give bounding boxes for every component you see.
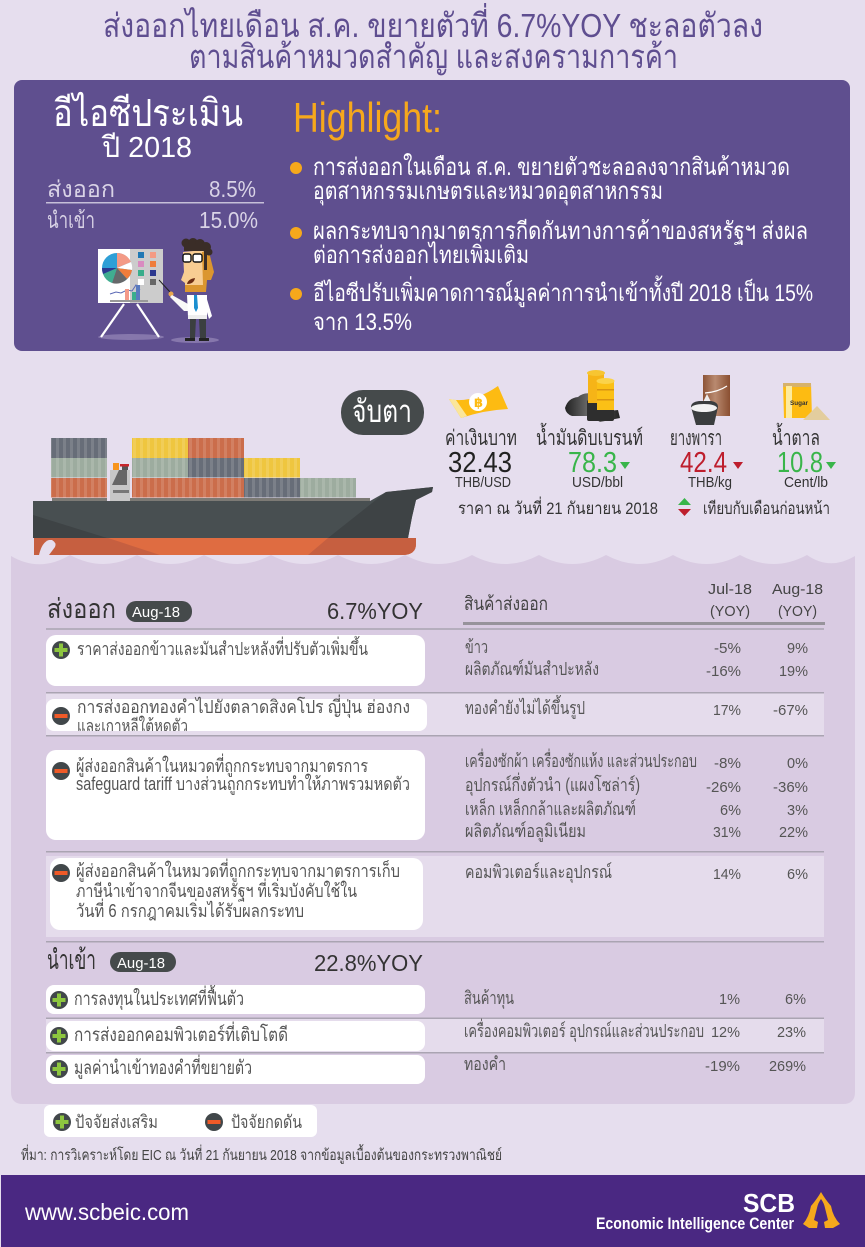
indicator: rubber <box>670 427 743 491</box>
rows: rice and cassava <box>465 637 808 680</box>
icon: SCB logo <box>803 1192 840 1228</box>
indicators <box>445 423 836 491</box>
forecast table: ส่งออก <box>47 176 115 202</box>
note: price date and comparison: ราคา ณ วันที่ 21 กันยายน 2018 <box>458 496 658 518</box>
factor: US tariffs on China: ภาษีนำเข้าจากจีนของสหรัฐฯ ที่เริ่มบังคับใช้ใน <box>76 878 357 902</box>
rows: rice and cassava: 9% <box>787 640 808 657</box>
row: computers: คอมพิวเตอร์และอุปกรณ์ <box>465 862 612 883</box>
factor: investment: การลงทุนในประเทศที่ฟื้นตัว <box>74 985 244 1011</box>
rows: safeguard: ผลิตภัณฑ์อลูมิเนียม <box>465 821 586 842</box>
legend <box>44 1105 317 1137</box>
panel: data table <box>11 555 855 1104</box>
rows: rice and cassava: 19% <box>779 663 808 680</box>
indicator: sugar: น้ำตาล <box>772 423 820 450</box>
row: computers and parts: เครื่องคอมพิวเตอร์ อุปกรณ์และส่วนประกอบ <box>464 1018 704 1042</box>
row: gold imports: 269% <box>769 1058 806 1075</box>
row: gold: 17% <box>713 702 741 719</box>
table header: สินค้าส่งออก <box>464 594 548 615</box>
bullet 3: จาก 13.5% <box>313 309 412 336</box>
panel: highlight <box>14 80 850 351</box>
table header: Jul-18 <box>708 581 752 598</box>
rows: safeguard: 31% <box>713 824 741 841</box>
indicator: sugar <box>772 423 836 491</box>
indicator: baht: 32.43 <box>448 447 512 479</box>
indicator: sugar: 10.8 <box>777 447 823 479</box>
row: computers: 14% <box>713 866 741 883</box>
factor: computer exports <box>46 1021 425 1051</box>
icon: presenter with chart <box>98 238 219 343</box>
imports heading <box>47 945 423 976</box>
note: price date and comparison <box>458 496 830 518</box>
row: capital goods: สินค้าทุน <box>464 988 514 1009</box>
factor: US tariffs on China: วันที่ 6 กรกฎาคมเริ่มได้รับผลกระทบ <box>76 898 304 921</box>
icon: oil barrels <box>565 370 620 422</box>
factor: gold exports: และเกาหลีใต้หดตัว <box>77 715 188 736</box>
factor: safeguard: safeguard tariff บางส่วนถูกกระทบทำให้ภาพรวมหดตัว <box>76 773 410 795</box>
footer band: Economic Intelligence Center <box>596 1214 794 1233</box>
indicator: brent: USD/bbl <box>572 474 623 491</box>
website: www.scbeic.com <box>24 1199 189 1225</box>
forecast table: 15.0% <box>199 207 258 233</box>
icon: sugar bag: Sugar <box>790 401 809 407</box>
rows: rice and cassava: -16% <box>706 663 741 680</box>
indicator: baht: ค่าเงินบาท <box>445 427 517 450</box>
factor: rice and cassava <box>46 635 425 686</box>
heading: highlight: Highlight: <box>293 94 442 141</box>
icon: rubber cup <box>691 375 730 425</box>
factor: investment <box>46 985 425 1014</box>
row: computers <box>465 862 808 883</box>
factor: rice and cassava: ราคาส่งออกข้าวและมันสำปะหลังที่ปรับตัวเพิ่มขึ้น <box>77 636 368 659</box>
bullet 1: อุตสาหกรรมเกษตรและหมวดอุตสาหกรรม <box>313 178 663 206</box>
legend: ปัจจัยกดดัน <box>231 1112 302 1132</box>
rows: safeguard: 3% <box>787 802 808 819</box>
rows: safeguard: -26% <box>706 779 741 796</box>
rows: rice and cassava: ข้าว <box>465 637 488 657</box>
factor: gold exports <box>46 694 427 731</box>
factor: US tariffs on China <box>50 858 423 930</box>
row: gold imports: ทองคำ <box>464 1054 506 1074</box>
forecast table: 8.5% <box>209 176 256 202</box>
brand: SCB <box>743 1188 795 1218</box>
label pill: watch: จับตา <box>352 394 412 429</box>
rows: safeguard: 0% <box>787 755 808 772</box>
note: price date and comparison: เทียบกับเดือนก่อนหน้า <box>703 499 830 518</box>
rows: safeguard: เครื่องซักผ้า เครื่องซักแห้ง และส่วนประกอบ <box>465 748 697 771</box>
factor: gold exports: การส่งออกทองคำไปยังตลาดสิงคโปร ญี่ปุ่น ฮ่องกง <box>77 694 410 718</box>
icon: baht flag <box>449 386 508 418</box>
factor: safeguard: ผู้ส่งออกสินค้าในหมวดที่ถูกกระทบจากมาตรการ <box>76 753 368 777</box>
factor: US tariffs on China: ผู้ส่งออกสินค้าในหมวดที่ถูกกระทบจากมาตรการเก็บ <box>76 858 400 882</box>
title <box>103 3 763 75</box>
forecast table <box>46 176 264 233</box>
indicator: brent: 78.3 <box>568 447 617 479</box>
indicator: rubber: THB/kg <box>688 474 732 491</box>
bands <box>46 693 824 1052</box>
indicator: brent <box>536 423 643 491</box>
rows: safeguard: 22% <box>779 824 808 841</box>
indicator: rubber: ยางพารา <box>670 427 722 450</box>
legend: ปัจจัยส่งเสริม <box>75 1112 158 1132</box>
exports heading <box>47 594 423 624</box>
rows: safeguard: เหล็ก เหล็กกล้าและผลิตภัณฑ์ <box>465 797 636 819</box>
forecast table: นำเข้า <box>47 207 95 233</box>
row: gold imports <box>464 1054 806 1075</box>
row: capital goods: 6% <box>785 991 806 1008</box>
row: computers and parts: 12% <box>711 1024 740 1041</box>
footer band <box>1 1175 865 1247</box>
exports heading: ส่งออก <box>47 594 116 624</box>
rows: safeguard: อุปกรณ์กึ่งตัวนำ (แผงโซล่าร์) <box>465 772 640 796</box>
row: computers: 6% <box>787 866 808 883</box>
row: computers and parts: 23% <box>777 1024 806 1041</box>
rows: safeguard: -36% <box>773 779 808 796</box>
table header: Aug-18 <box>772 581 823 598</box>
row: gold <box>465 695 808 719</box>
bullet 3 <box>290 275 813 336</box>
indicator: baht <box>445 427 517 491</box>
rows: safeguard: -8% <box>714 755 741 772</box>
indicator: rubber: 42.4 <box>680 447 727 479</box>
row: gold: -67% <box>773 702 808 719</box>
illustration: container ship <box>33 438 433 555</box>
indicator: baht: THB/USD <box>455 474 511 491</box>
rows: rice and cassava: -5% <box>714 640 741 657</box>
title: ส่งออกไทยเดือน ส.ค. ขยายตัวที่ 6.7%YOY ชะลอตัวลง <box>103 3 763 44</box>
bullet 2 <box>290 218 808 269</box>
title: ตามสินค้าหมวดสำคัญ และสงครามการค้า <box>189 38 678 75</box>
table header: (YOY) <box>710 603 750 620</box>
factor: safeguard <box>46 750 425 840</box>
heading: EIC forecast: ปี 2018 <box>102 132 192 164</box>
table header: (YOY) <box>778 603 817 620</box>
label pill: watch <box>341 390 424 435</box>
icon: sugar bag <box>783 383 830 420</box>
row: gold: ทองคำยังไม่ได้ขึ้นรูป <box>465 695 585 719</box>
bullet 2: ต่อการส่งออกไทยเพิ่มเติม <box>313 238 529 269</box>
rows: safeguard: 6% <box>720 802 741 819</box>
bullet 1 <box>290 153 790 206</box>
indicator: brent: น้ำมันดิบเบรนท์ <box>536 423 643 450</box>
row: capital goods <box>464 988 806 1009</box>
rows: rice and cassava: ผลิตภัณฑ์มันสำปะหลัง <box>465 659 599 679</box>
table header <box>463 581 825 625</box>
imports heading: นำเข้า <box>47 945 96 975</box>
exports heading: Aug-18 <box>132 604 180 621</box>
heading: EIC forecast: อีไอซีประเมิน <box>53 92 243 135</box>
factor: computer exports: การส่งออกคอมพิวเตอร์ที่เติบโตดี <box>74 1021 288 1046</box>
factor: gold imports: มูลค่านำเข้าทองคำที่ขยายตัว <box>74 1054 252 1079</box>
source note: ที่มา: การวิเคราะห์โดย EIC ณ วันที่ 21 กันยายน 2018 จากข้อมูลเบื้องต้นของกระทรวงพาณิชย์ <box>21 1144 502 1164</box>
row: capital goods: 1% <box>719 991 740 1008</box>
imports heading: Aug-18 <box>117 955 165 972</box>
indicator: sugar: Cent/lb <box>784 474 828 491</box>
exports heading: 6.7%YOY <box>327 598 423 624</box>
heading: EIC forecast <box>53 92 243 164</box>
icon: baht flag: ฿ <box>474 395 483 410</box>
rows: safeguard <box>465 748 808 842</box>
row: gold imports: -19% <box>705 1058 740 1075</box>
imports heading: 22.8%YOY <box>314 950 423 976</box>
factor: gold imports <box>46 1054 425 1084</box>
